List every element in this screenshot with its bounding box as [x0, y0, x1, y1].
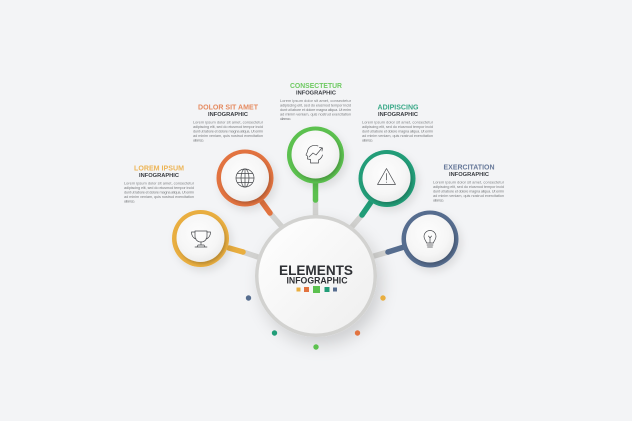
connector stems	[229, 182, 404, 257]
text block: consectetur: CONSECTETUR	[290, 81, 342, 90]
text block: adipiscing: dunt ut labore et dolore magna aliqua. Ut enim	[362, 128, 433, 134]
text block: lorem ipsum: adipiscing elit, sed do eiusmod tempor incid	[124, 185, 194, 190]
text block: dolor sit amet: dunt ut labore et dolore magna aliqua. Ut enim	[193, 128, 263, 134]
text block: exercitation: ad minim veniam, quis nostrud exercitation	[433, 193, 504, 198]
text block: lorem ipsum: Lorem ipsum dolor sit amet, consectetur	[124, 180, 195, 186]
central title: ELEMENTS	[279, 262, 353, 278]
text block: consectetur: dunt ut labore et dolore magna aliqua. Ut enim	[280, 107, 351, 112]
text block: dolor sit amet: adipiscing elit, sed do eiusmod tempor incid	[193, 124, 263, 129]
icon: trophy	[192, 231, 210, 247]
text block: lorem ipsum: ad minim veniam, quis nostrud exercitation	[124, 194, 194, 199]
text block: adipiscing: Lorem ipsum dolor sit amet, consectetur	[362, 120, 434, 124]
text block: lorem ipsum: LOREM IPSUM	[134, 164, 184, 172]
text block: consectetur: Lorem ipsum dolor sit amet, consectetur	[280, 98, 352, 103]
text block: dolor sit amet: DOLOR SIT AMET	[198, 102, 258, 112]
text block: adipiscing: adipiscing elit, sed do eiusmod tempor incid	[362, 124, 433, 129]
text block: exercitation	[433, 162, 505, 202]
text block: exercitation: Lorem ipsum dolor sit amet, consectetur	[433, 180, 505, 184]
icon: light bulb	[424, 230, 436, 247]
central circle	[255, 215, 377, 337]
icon: globe	[236, 169, 254, 187]
icon: warning triangle	[378, 168, 396, 184]
icon: head with chart	[306, 145, 322, 163]
text block: exercitation: dunt ut labore et dolore magna aliqua. Ut enim	[433, 188, 504, 194]
text block: exercitation: adipiscing elit, sed do eiusmod tempor incid	[433, 184, 504, 189]
text block: dolor sit amet: ullamco.	[193, 138, 204, 142]
node: blue bulb	[402, 210, 458, 268]
node: green head chart	[287, 126, 344, 184]
text block: lorem ipsum: dunt ut labore et dolore magna aliqua. Ut enim	[124, 190, 194, 194]
text block: consectetur	[280, 81, 352, 121]
text block: adipiscing: INFOGRAPHIC	[378, 112, 418, 118]
text block: exercitation: INFOGRAPHIC	[449, 172, 489, 178]
text block: consectetur: ullamco.	[280, 116, 291, 121]
text block: consectetur: adipiscing elit, sed do eiusmod tempor incid	[280, 102, 351, 108]
text block: dolor sit amet: Lorem ipsum dolor sit amet, consectetur	[193, 120, 264, 124]
text block: dolor sit amet: ad minim veniam, quis nostrud exercitation	[193, 133, 263, 138]
node: teal warning	[358, 150, 416, 207]
text block: exercitation: ullamco.	[433, 198, 444, 202]
text block: adipiscing: ullamco.	[362, 138, 373, 142]
text block: dolor sit amet: INFOGRAPHIC	[208, 112, 248, 118]
text block: consectetur: ad minim veniam, quis nostrud exercitation	[280, 112, 351, 116]
text block: adipiscing: ADIPISCING	[378, 102, 419, 112]
text block: adipiscing	[362, 102, 434, 142]
colour squares	[296, 286, 337, 293]
text block: lorem ipsum: INFOGRAPHIC	[139, 173, 179, 179]
text block: lorem ipsum: ullamco.	[124, 198, 135, 204]
text block: dolor sit amet	[193, 102, 264, 142]
indicator dots	[246, 295, 386, 350]
text block: lorem ipsum	[124, 164, 195, 204]
text block: consectetur: INFOGRAPHIC	[296, 90, 336, 96]
central subtitle: INFOGRAPHIC	[286, 276, 348, 286]
node: yellow trophy	[172, 210, 229, 267]
text block: exercitation: EXERCITATION	[444, 162, 494, 172]
text block: adipiscing: ad minim veniam, quis nostrud exercitation	[362, 133, 433, 138]
node: orange globe	[216, 150, 274, 206]
